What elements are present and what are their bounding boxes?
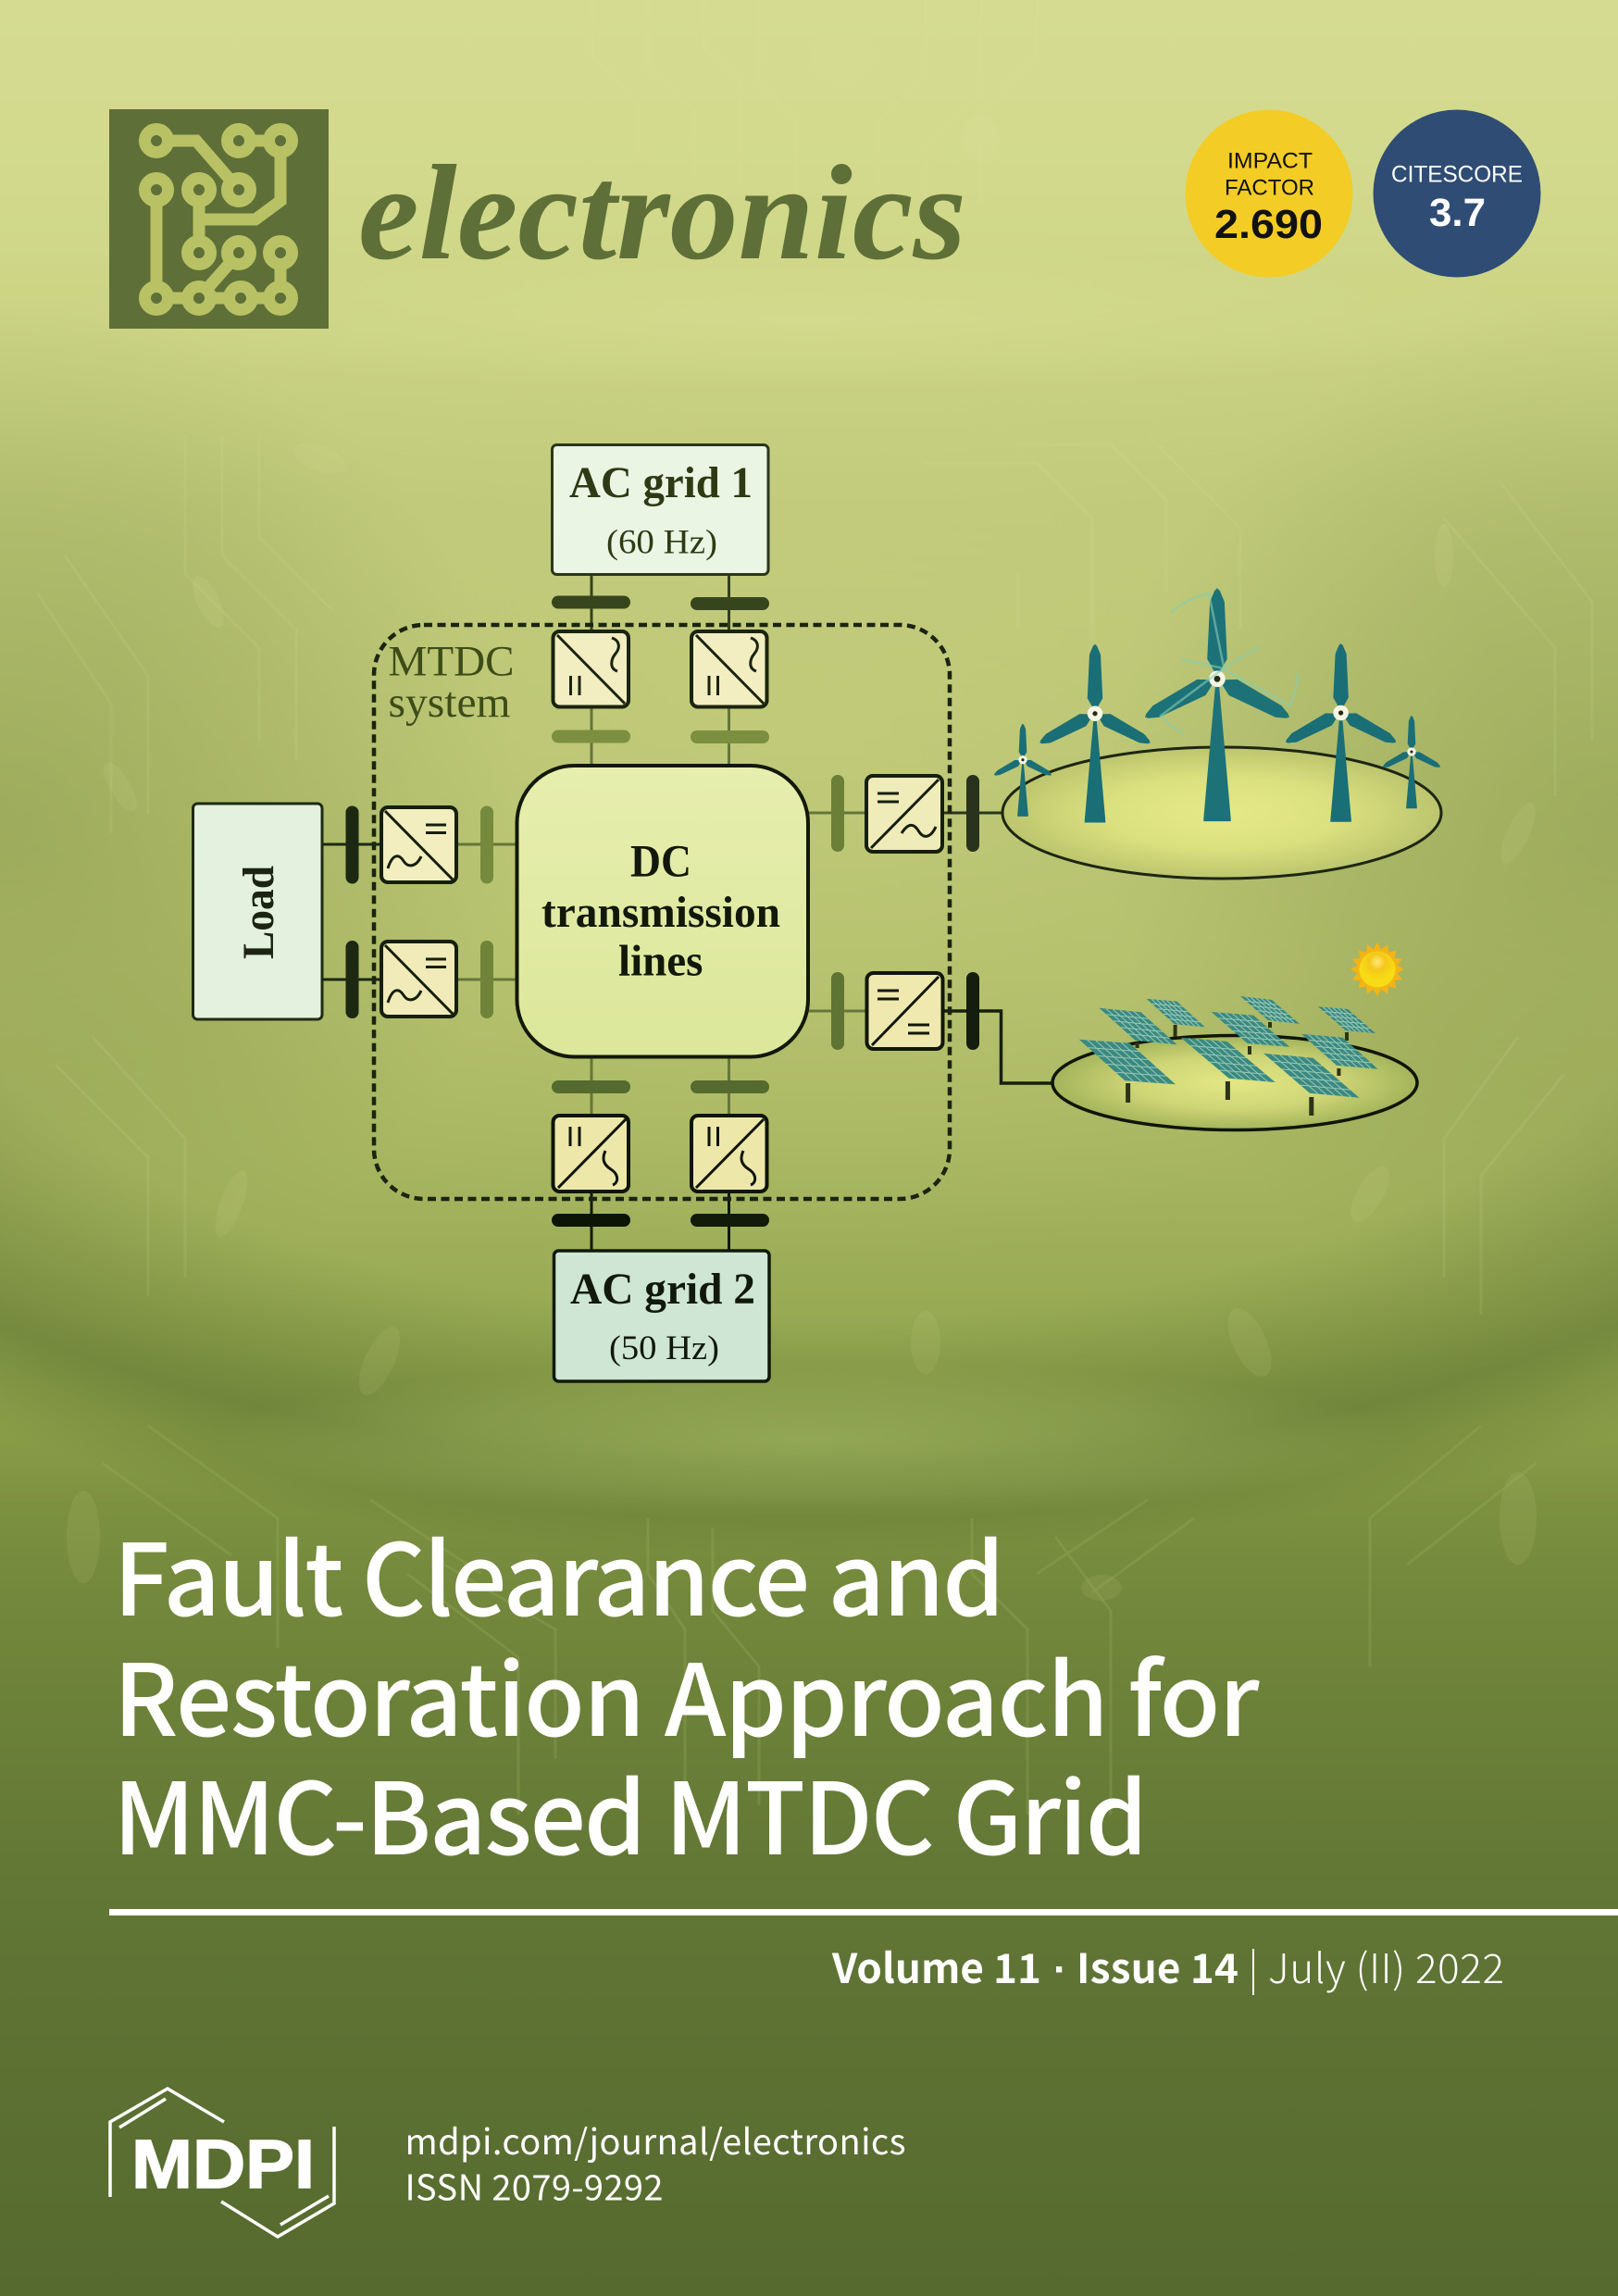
label: MTDC system: system: [389, 679, 511, 727]
journal URL and ISSN: mdpi.com/journal/electronics: [405, 2114, 905, 2165]
logo pads: [144, 130, 292, 309]
solar panels: [1079, 996, 1378, 1098]
converter: AC grid 1 left: [554, 631, 629, 707]
solar farm: [1052, 942, 1417, 1129]
load box: Load: [234, 866, 283, 959]
turbine: centre: [1141, 588, 1293, 821]
dashed MTDC system boundary: [374, 625, 950, 1199]
busbars: dark outer: [346, 596, 979, 1227]
MDPI logo: [110, 2089, 334, 2237]
badge: citescore: [1374, 109, 1540, 278]
turbine: far left: [992, 724, 1053, 817]
article title: Restoration Approach for: [113, 1621, 1260, 1765]
AC grid 2 box: [554, 1251, 769, 1381]
article title: Fault Clearance and: [113, 1501, 1005, 1644]
connection lines: [322, 574, 1052, 1251]
solar farm ground ellipse: [1052, 1035, 1417, 1129]
issue information: Volume 11: [831, 1936, 1041, 1995]
MDPI logo: MDPI: [131, 2126, 315, 2202]
badge: citescore: 3.7: [1429, 191, 1486, 235]
DC transmission lines box: lines: [618, 937, 703, 985]
article title: MMC-Based MTDC Grid: [113, 1740, 1148, 1883]
AC grid 2 box: AC grid 2: [570, 1265, 755, 1314]
issue information: ·: [1053, 1947, 1067, 1992]
journal URL and ISSN: [405, 2114, 905, 2211]
AC grid 1 box: (60 Hz): [606, 524, 717, 561]
icon: sun: [1350, 942, 1404, 996]
journal name: electronics: [358, 137, 966, 288]
turbine: left: [1037, 644, 1153, 822]
badge: impact factor: 2.690: [1214, 202, 1323, 247]
wind farm: [992, 588, 1442, 879]
rotor motion streaks: [1161, 593, 1298, 734]
converter: solar farm: [866, 973, 942, 1049]
converter: wind farm: [866, 776, 942, 852]
converter: AC grid 2 left: [554, 1116, 629, 1192]
issue information: Issue 14: [1077, 1936, 1238, 1995]
label: MTDC system: MTDC: [389, 637, 515, 685]
logo circuit traces: [156, 141, 280, 298]
badge: impact factor: [1185, 109, 1353, 278]
journal URL and ISSN: ISSN 2079-9292: [405, 2159, 663, 2211]
label: MTDC system: [389, 637, 515, 727]
load box: [193, 804, 322, 1019]
divider rule: [109, 1909, 1618, 1915]
turbine: right: [1283, 643, 1400, 822]
panel posts: [1128, 1022, 1347, 1116]
converter: AC grid 2 right: [691, 1116, 766, 1192]
issue information: July (II) 2022: [1268, 1936, 1504, 1995]
badge: impact factor: FACTOR: [1225, 176, 1314, 200]
busbars: translucent inner: [480, 730, 844, 1093]
wind farm ground ellipse: [1002, 747, 1441, 879]
DC transmission lines box: transmission: [541, 888, 780, 937]
converter: load upper: [381, 807, 456, 882]
converter: AC grid 1 right: [691, 631, 766, 707]
MTDC diagram: [193, 444, 1052, 1381]
AC grid 2 box: (50 Hz): [609, 1329, 719, 1367]
article title: [113, 1501, 1260, 1883]
AC grid 1 box: AC grid 1: [569, 458, 753, 507]
converter: load lower: [381, 942, 456, 1017]
issue information: [831, 1936, 1504, 1995]
journal logo: [109, 109, 329, 329]
turbine: far right: [1381, 716, 1442, 808]
badge: impact factor: IMPACT: [1227, 148, 1313, 174]
AC grid 1 box: [552, 444, 768, 574]
DC transmission lines box: [517, 766, 808, 1057]
DC transmission lines box: DC: [630, 835, 691, 887]
badge: citescore: CITESCORE: [1391, 161, 1523, 187]
